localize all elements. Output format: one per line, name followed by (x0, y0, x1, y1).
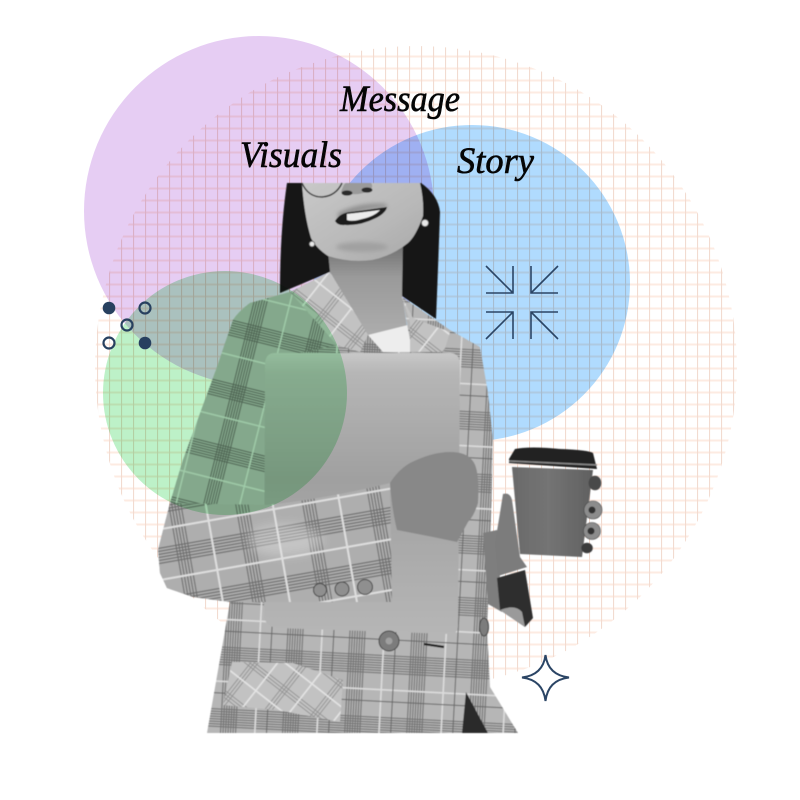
sleeve highlight (247, 524, 323, 556)
right lapel (402, 297, 450, 352)
hair (280, 183, 440, 319)
cuff lining (500, 607, 525, 627)
pocket flap (223, 662, 343, 722)
cup body (512, 467, 593, 557)
fingernails (588, 506, 596, 534)
teeth (347, 210, 380, 221)
side button (480, 618, 488, 636)
coat button (379, 631, 399, 651)
glasses (302, 183, 342, 197)
hand on laptop (390, 452, 478, 542)
laptop (264, 353, 460, 634)
nose (341, 183, 372, 194)
label: Visuals: Visuals (240, 135, 342, 176)
shirt (368, 325, 414, 354)
circle: green (103, 271, 347, 515)
chin shading (336, 242, 388, 252)
face (302, 183, 423, 261)
coffee cup (509, 448, 597, 557)
pocket slit (424, 644, 444, 647)
earrings (309, 220, 428, 247)
fingers (582, 476, 602, 553)
icon: sparkle star (522, 655, 569, 701)
neck (328, 240, 410, 345)
lid rim (509, 461, 597, 465)
photo: woman with laptop and coffee cup (158, 183, 602, 733)
icon: four inward arrows (486, 266, 558, 339)
front opening (462, 692, 488, 733)
right sleeve edge (483, 530, 502, 612)
sleeve buttons (314, 580, 372, 596)
cuff: right sleeve (497, 570, 533, 627)
circle: purple (84, 36, 434, 386)
left lapel (290, 272, 368, 352)
sleeve: folded arm (158, 483, 392, 602)
hand holding cup (495, 494, 527, 576)
circle: blue (314, 125, 630, 441)
cup lid (509, 448, 597, 469)
label: Message: Message (339, 79, 460, 120)
label: Story: Story (457, 141, 534, 182)
background grid circle (90, 40, 740, 695)
lip shadow (338, 204, 387, 220)
smile (335, 207, 387, 225)
nostrils (342, 187, 372, 196)
upper sleeve (170, 292, 337, 506)
blazer (158, 272, 518, 733)
icon: dots cluster (103, 302, 151, 349)
